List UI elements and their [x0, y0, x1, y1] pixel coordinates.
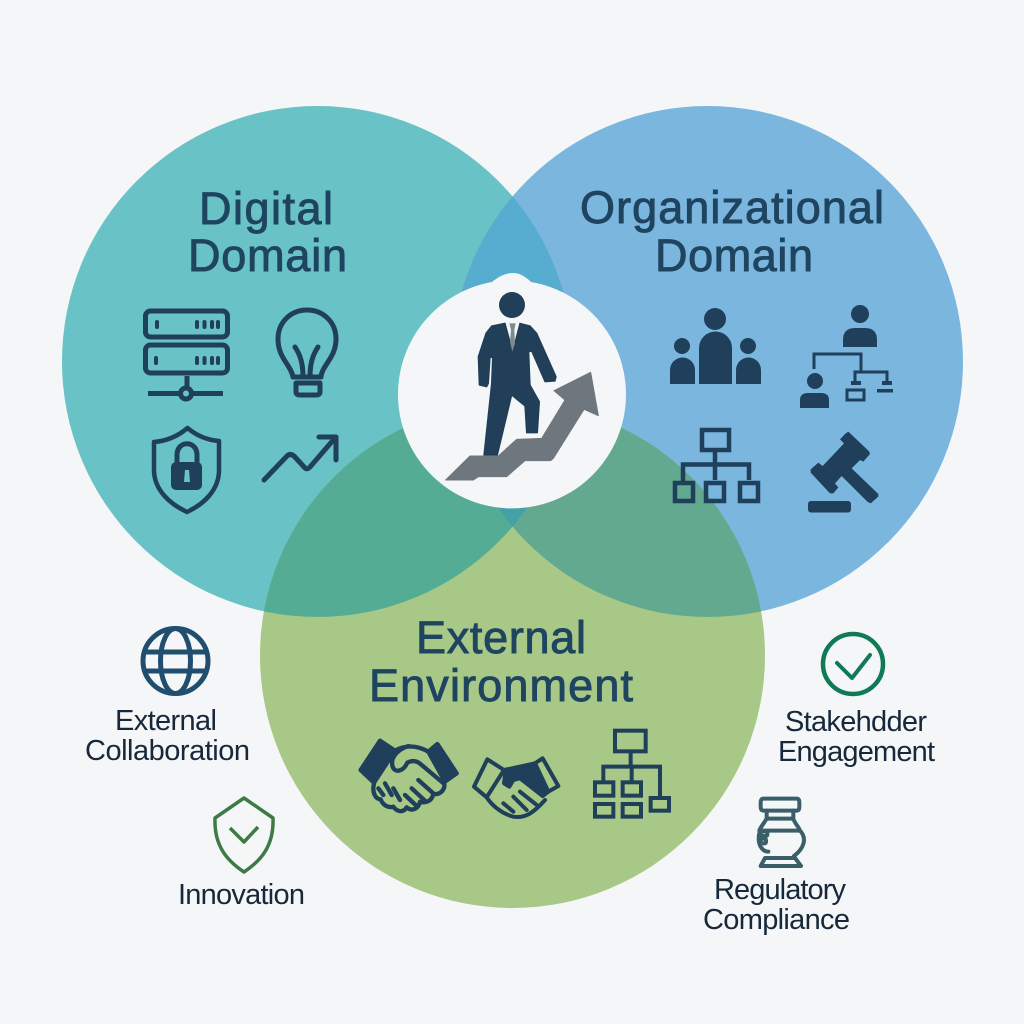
overlap: all three	[498, 508, 527, 526]
label: stakeholder engagement: Stakehdder	[785, 706, 927, 738]
badge background	[398, 273, 626, 508]
icon: handshake one	[361, 741, 457, 811]
icon: green shield	[215, 798, 273, 872]
icon: hierarchy diagram	[675, 430, 758, 501]
icon: handshake two	[474, 758, 558, 817]
panel: organizational domain	[580, 182, 893, 512]
circle: digital domain	[62, 106, 573, 617]
icon: server	[146, 311, 228, 399]
heading: external environment	[369, 612, 633, 711]
icon: organization chart with people	[800, 305, 893, 408]
label: innovation: Innovation	[178, 879, 305, 911]
heading: external environment: External	[416, 612, 586, 663]
venn diagram circles	[62, 106, 963, 908]
icon: tree chart	[595, 731, 669, 817]
icon: check circle	[823, 634, 883, 694]
heading: organizational domain	[580, 182, 884, 281]
icon: team of people	[670, 308, 761, 384]
icon: security shield with padlock	[154, 428, 219, 512]
label: stakeholder engagement: Engagement	[778, 736, 935, 768]
label: external collaboration: Collaboration	[85, 735, 250, 767]
overlap: organizational and external	[512, 428, 761, 617]
icon: gavel	[808, 432, 878, 512]
icon: businessman climbing arrow	[446, 292, 598, 480]
icon: globe	[143, 628, 208, 694]
icon: light bulb	[278, 310, 336, 395]
callout: stakeholder engagement	[778, 634, 935, 768]
icon: jug	[759, 799, 804, 866]
label: regulatory compliance	[703, 874, 850, 936]
panel: digital domain	[146, 183, 347, 512]
panel: external environment	[361, 612, 669, 817]
label: stakeholder engagement	[778, 706, 935, 768]
heading: external environment: Environment	[369, 660, 633, 711]
label: regulatory compliance: Compliance	[703, 904, 850, 936]
heading: digital domain: Domain	[188, 230, 347, 281]
callout: innovation	[178, 798, 305, 911]
overlap: digital and external	[264, 428, 512, 617]
heading: digital domain	[188, 183, 347, 281]
center badge	[398, 273, 626, 508]
label: external collaboration: External	[115, 705, 217, 737]
heading: organizational domain: Domain	[655, 230, 813, 281]
callout: regulatory compliance	[703, 799, 850, 936]
heading: digital domain: Digital	[199, 183, 333, 234]
overlap: digital and organizational	[462, 196, 564, 292]
circle: external environment	[260, 403, 765, 908]
icon: growth arrow	[264, 437, 336, 480]
circle: organizational domain	[452, 106, 963, 617]
callout: external collaboration	[85, 628, 250, 767]
heading: organizational domain: Organizational	[580, 182, 884, 233]
label: regulatory compliance: Regulatory	[714, 874, 846, 906]
label: external collaboration	[85, 705, 250, 767]
